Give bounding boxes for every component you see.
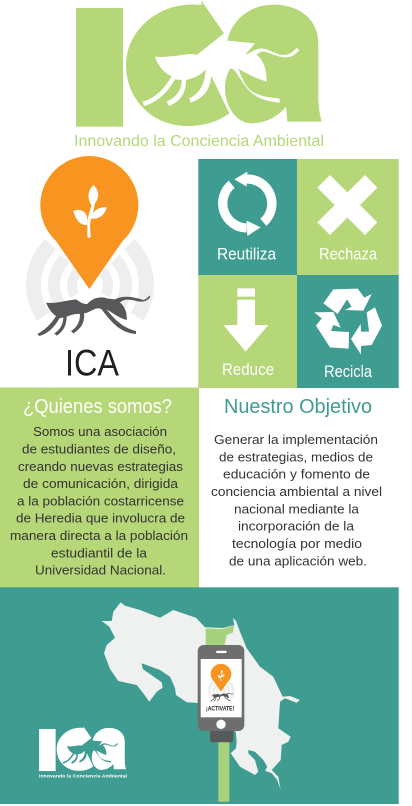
text block: Quienes somos body: de estudiantes de diseño, (22, 441, 176, 456)
text block: Quienes somos body: a la población costarricense (17, 494, 184, 509)
label: Recicla: Recicla (324, 363, 373, 381)
icon: mini location pin (209, 664, 234, 702)
label: activate: ¡ACTIVATE! (206, 707, 234, 713)
text block: Quienes somos body: de comunicación, dirigida (23, 476, 179, 491)
ICA label: ICA (65, 342, 119, 384)
logo: ICA green wordmark with ant (76, 0, 322, 127)
text block: Quienes somos body: Somos una asociación (33, 424, 167, 439)
tagline: Innovando la Conciencia Ambiental (74, 133, 324, 150)
text block: Quienes somos body: de Heredia que involucra de (16, 511, 185, 526)
text block: Nuestro Objetivo body: de una aplicación web. (229, 554, 367, 569)
label: Reduce: Reduce (222, 361, 274, 379)
panel: Rechaza (297, 159, 399, 275)
panel: Reutiliza (198, 159, 297, 275)
text block: Quienes somos body: manera directa a la población (10, 528, 188, 543)
text block: Quienes somos body (10, 424, 188, 578)
icon: cross (317, 175, 377, 235)
heading: Quienes somos: ¿Quienes somos? (23, 395, 172, 418)
panel: Quienes somos (0, 388, 199, 588)
text block: Nuestro Objetivo body: Generar la implementación (214, 432, 378, 447)
text block: Nuestro Objetivo body: incorporación de la (238, 519, 355, 534)
logo: white ICA wordmark (39, 726, 126, 771)
map: Costa Rica (102, 602, 300, 790)
icon: smartphone (198, 645, 244, 742)
icon: down arrow (223, 288, 268, 352)
icon: location pin with sprout and ant (34, 156, 150, 336)
text block: Nuestro Objetivo body: educación y fomento de (223, 466, 370, 481)
text block: Nuestro Objetivo body: nacional mediante la (234, 501, 360, 516)
text block: Nuestro Objetivo body: de estrategias, medios de (219, 449, 373, 464)
text block: Quienes somos body: estudiantil de la (51, 545, 148, 560)
icon: recycle arrows (314, 289, 382, 355)
tagline: white: Innovando la Conciencia Ambiental (39, 774, 127, 780)
label: Rechaza: Rechaza (319, 246, 378, 264)
cable: green strip (206, 625, 234, 802)
text block: Nuestro Objetivo body: conciencia ambiental a nivel (211, 484, 382, 499)
text block: Nuestro Objetivo body (211, 432, 382, 569)
panel: Recicla (297, 275, 399, 388)
panel: map and app footer (0, 587, 399, 804)
panel: Reduce (198, 275, 297, 388)
panel: Nuestro Objetivo (211, 395, 382, 569)
text block: Quienes somos body: creando nuevas estrategias (18, 459, 183, 474)
label: Reutiliza: Reutiliza (217, 246, 277, 264)
icon: circular arrows (223, 172, 272, 236)
text block: Nuestro Objetivo body: tecnología por medio (232, 536, 362, 551)
text block: Quienes somos body: Universidad Nacional. (35, 563, 166, 578)
heading: Nuestro Objetivo: Nuestro Objetivo (224, 395, 372, 418)
